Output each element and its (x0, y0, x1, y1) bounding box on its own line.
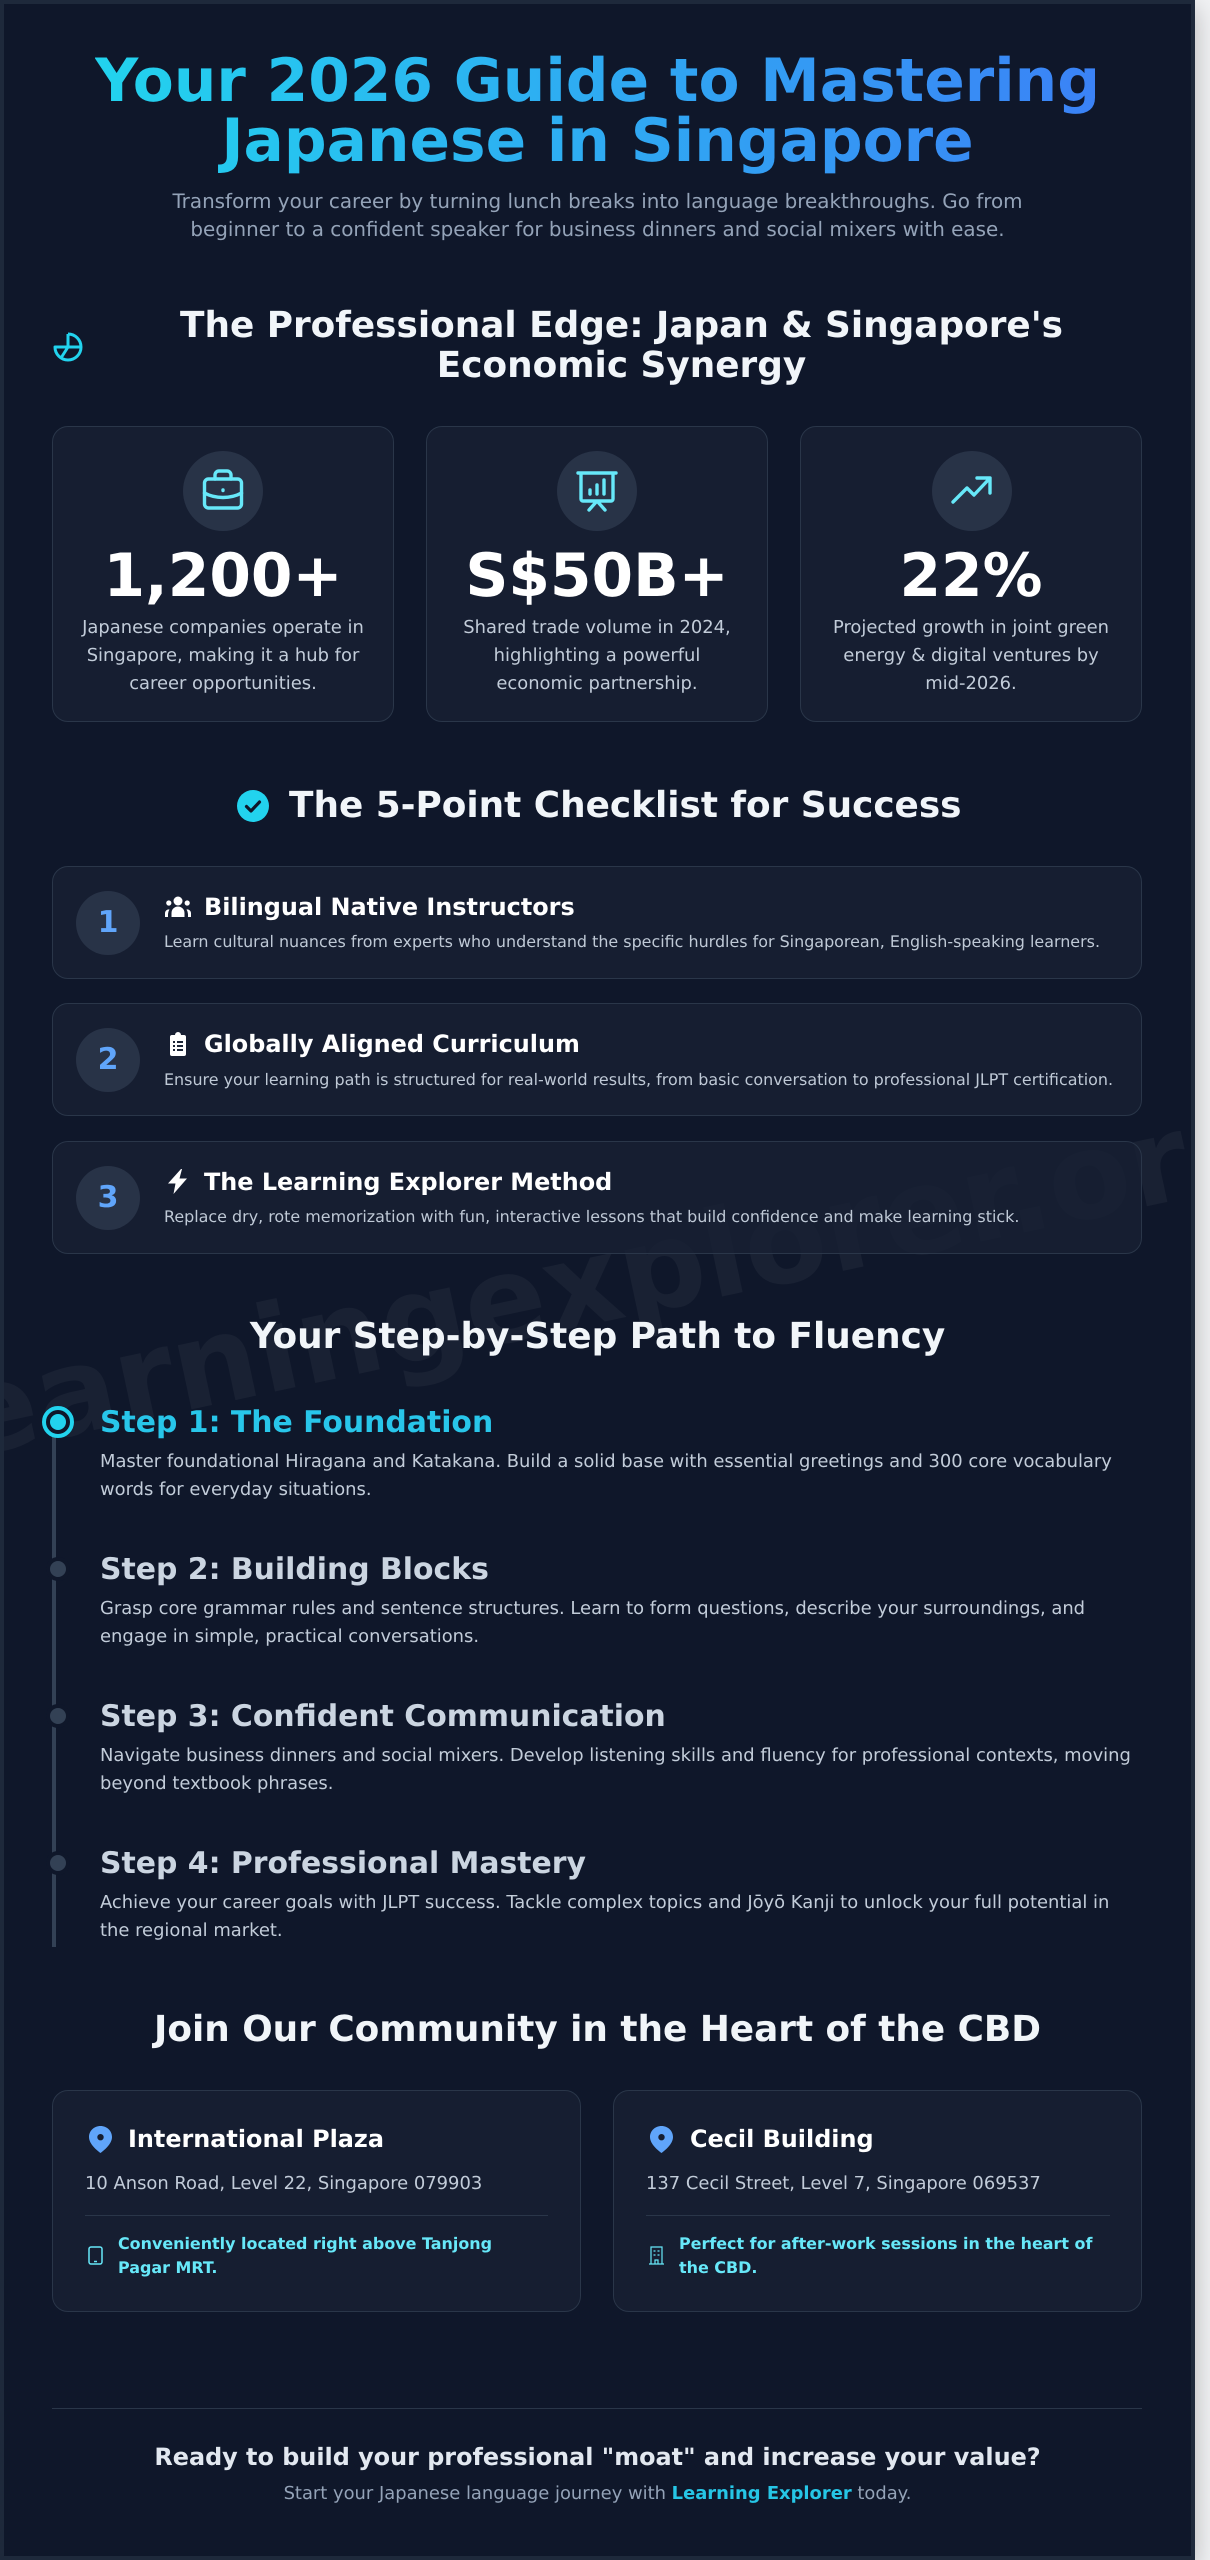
stat description: career opportunities. (129, 673, 317, 694)
icon: clipboard (170, 1032, 186, 1056)
subtitle (172, 190, 1023, 241)
step 4 title: Step 4: Professional Mastery (100, 1846, 586, 1881)
title: Your 2026 Guide to Mastering (95, 47, 1100, 116)
number badge 2 (76, 1028, 140, 1092)
step 3 description (100, 1745, 1131, 1794)
step 3 description: beyond textbook phrases. (100, 1773, 333, 1794)
heading: professional edge (180, 305, 1063, 386)
number badge 1 (76, 891, 140, 955)
step 1 description: Master foundational Hiragana and Katakana. Build a solid base with essential greetings and 300 core vocabulary (100, 1451, 1112, 1472)
icon: trending up (951, 476, 992, 504)
stat description: mid-2026. (925, 673, 1017, 694)
step 2 description: Grasp core grammar rules and sentence structures. Learn to form questions, describe your surroundings, and (100, 1598, 1085, 1619)
stat description: Shared trade volume in 2024, (463, 617, 731, 638)
panel: location card 2 (613, 2090, 1142, 2312)
heading: path to fluency: Your Step-by-Step Path to Fluency (250, 1316, 945, 1357)
location address: 10 Anson Road, Level 22, Singapore 079903 (85, 2173, 482, 2194)
icon: building (649, 2246, 664, 2265)
stat number: 1,200+ (103, 542, 343, 611)
step 1 description: words for everyday situations. (100, 1479, 372, 1500)
icon: briefcase (202, 469, 244, 510)
step 2 description (100, 1598, 1085, 1647)
item description: Ensure your learning path is structured for real-world results, from basic conversation to professional JLPT certification. (164, 1070, 1113, 1089)
number 3: 3 (98, 1180, 118, 1215)
footer text: Start your Japanese language journey with Learning Explorer today. (284, 2483, 911, 2504)
step 4 description (100, 1892, 1109, 1941)
panel: checklist item 3 (52, 1141, 1142, 1254)
icon: presentation chart (576, 471, 618, 512)
panel: location card 1 (52, 2090, 581, 2312)
icon circle: presentation (557, 451, 637, 531)
stat number: S$50B+ (465, 542, 729, 611)
panel: stat card 2 (426, 426, 768, 722)
icon circle: briefcase (183, 451, 263, 531)
number badge 3 (76, 1166, 140, 1230)
step 3 marker (46, 1704, 70, 1728)
location note: Pagar MRT. (118, 2258, 217, 2277)
title (95, 47, 1100, 176)
number 1: 1 (98, 905, 118, 940)
icon: map pin (89, 2126, 112, 2153)
heading: community: Join Our Community in the Heart of the CBD (154, 2009, 1041, 2050)
icon: phone (88, 2246, 103, 2265)
item title: The Learning Explorer Method (204, 1168, 612, 1196)
item title: Globally Aligned Curriculum (204, 1030, 580, 1058)
item description: Learn cultural nuances from experts who understand the specific hurdles for Singaporean, English-speaking learners. (164, 932, 1100, 951)
step 2 title: Step 2: Building Blocks (100, 1552, 489, 1587)
stat description: Singapore, making it a hub for (87, 645, 359, 666)
item title: Bilingual Native Instructors (204, 893, 575, 921)
location note: the CBD. (679, 2258, 757, 2277)
step 1 title: Step 1: The Foundation (100, 1405, 493, 1440)
subtitle: Transform your career by turning lunch breaks into language breakthroughs. Go from (172, 190, 1023, 213)
number 2: 2 (98, 1042, 118, 1077)
stat description: highlighting a powerful (494, 645, 700, 666)
step 3 description: Navigate business dinners and social mixers. Develop listening skills and fluency for professional contexts, moving (100, 1745, 1131, 1766)
stat description (833, 617, 1109, 694)
location address: 137 Cecil Street, Level 7, Singapore 069537 (646, 2173, 1041, 2194)
active step marker (42, 1406, 74, 1438)
stat description: Projected growth in joint green (833, 617, 1109, 638)
step 1 description (100, 1451, 1112, 1500)
stat description: energy & digital ventures by (843, 645, 1099, 666)
stat description (81, 617, 364, 694)
stat description: Japanese companies operate in (82, 617, 364, 638)
location note (118, 2234, 492, 2277)
location note (679, 2234, 1093, 2277)
title: Japanese in Singapore (221, 107, 974, 176)
footer call to action: Ready to build your professional "moat" and increase your value? (154, 2443, 1041, 2471)
stat description (463, 617, 731, 694)
subtitle: beginner to a confident speaker for business dinners and social mixers with ease. (190, 218, 1005, 241)
icon circle: trend (932, 451, 1012, 531)
step 4 marker (46, 1851, 70, 1875)
panel: stat card 1 (52, 426, 394, 722)
icon: bolt (168, 1169, 187, 1194)
location note: Conveniently located right above Tanjong (118, 2234, 492, 2253)
step 3 title: Step 3: Confident Communication (100, 1699, 666, 1734)
step 4 description: the regional market. (100, 1920, 283, 1941)
icon: map pin (650, 2126, 673, 2153)
stat number: 22% (899, 542, 1042, 611)
icon: users (165, 896, 191, 917)
stat description: economic partnership. (496, 673, 698, 694)
timeline line (52, 1422, 56, 1947)
panel: checklist item 2 (52, 1003, 1142, 1116)
step 2 marker (46, 1557, 70, 1581)
heading: checklist: The 5-Point Checklist for Success (289, 785, 962, 826)
icon: check badge (237, 790, 269, 822)
location title: International Plaza (128, 2125, 384, 2153)
icon: pie chart (54, 332, 82, 362)
location note: Perfect for after-work sessions in the heart of (679, 2234, 1092, 2253)
panel: stat card 3 (800, 426, 1142, 722)
location title: Cecil Building (690, 2125, 874, 2153)
heading: professional edge: Economic Synergy (437, 345, 806, 386)
step 2 description: engage in simple, practical conversations. (100, 1626, 479, 1647)
panel: checklist item 1 (52, 866, 1142, 979)
heading: professional edge: The Professional Edge: Japan & Singapore's (180, 305, 1063, 346)
item description: Replace dry, rote memorization with fun, interactive lessons that build confidence and make learning stick. (164, 1207, 1019, 1226)
step 4 description: Achieve your career goals with JLPT success. Tackle complex topics and Jōyō Kanji to unlock your full potential in (100, 1892, 1109, 1913)
